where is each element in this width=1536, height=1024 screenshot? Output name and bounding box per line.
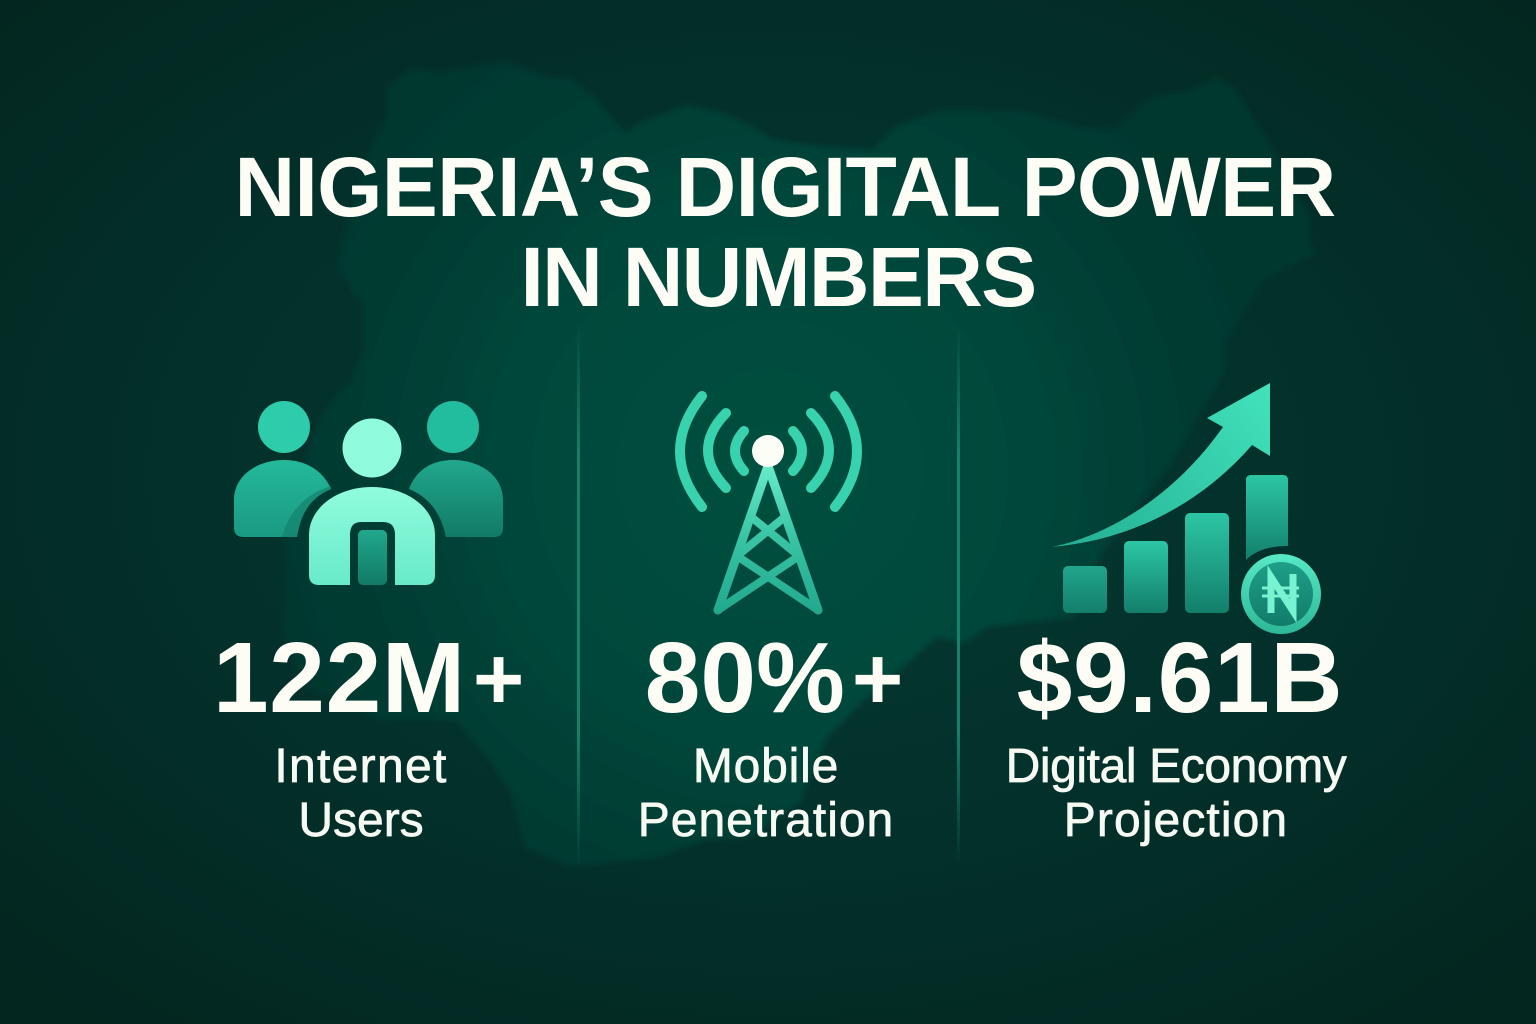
label: internet users (274, 740, 448, 847)
title (235, 140, 1335, 324)
value: $9.61B: $9.61B (1017, 622, 1343, 734)
value: 122M+: 122M+ (213, 622, 525, 734)
title: IN NUMBERS (520, 230, 1036, 324)
label: internet users: Internet (274, 740, 448, 793)
label: mobile penetration: Penetration (638, 794, 894, 847)
label: digital economy projection (1006, 740, 1348, 847)
value: 80%+: 80%+ (645, 622, 903, 734)
label: mobile penetration (638, 740, 894, 847)
label: digital economy projection: Digital Economy (1006, 740, 1346, 793)
label: internet users: Users (298, 794, 424, 847)
label: mobile penetration: Mobile (693, 740, 839, 793)
label: digital economy projection: Projection (1064, 794, 1288, 847)
title: NIGERIA’S DIGITAL POWER (235, 140, 1335, 234)
